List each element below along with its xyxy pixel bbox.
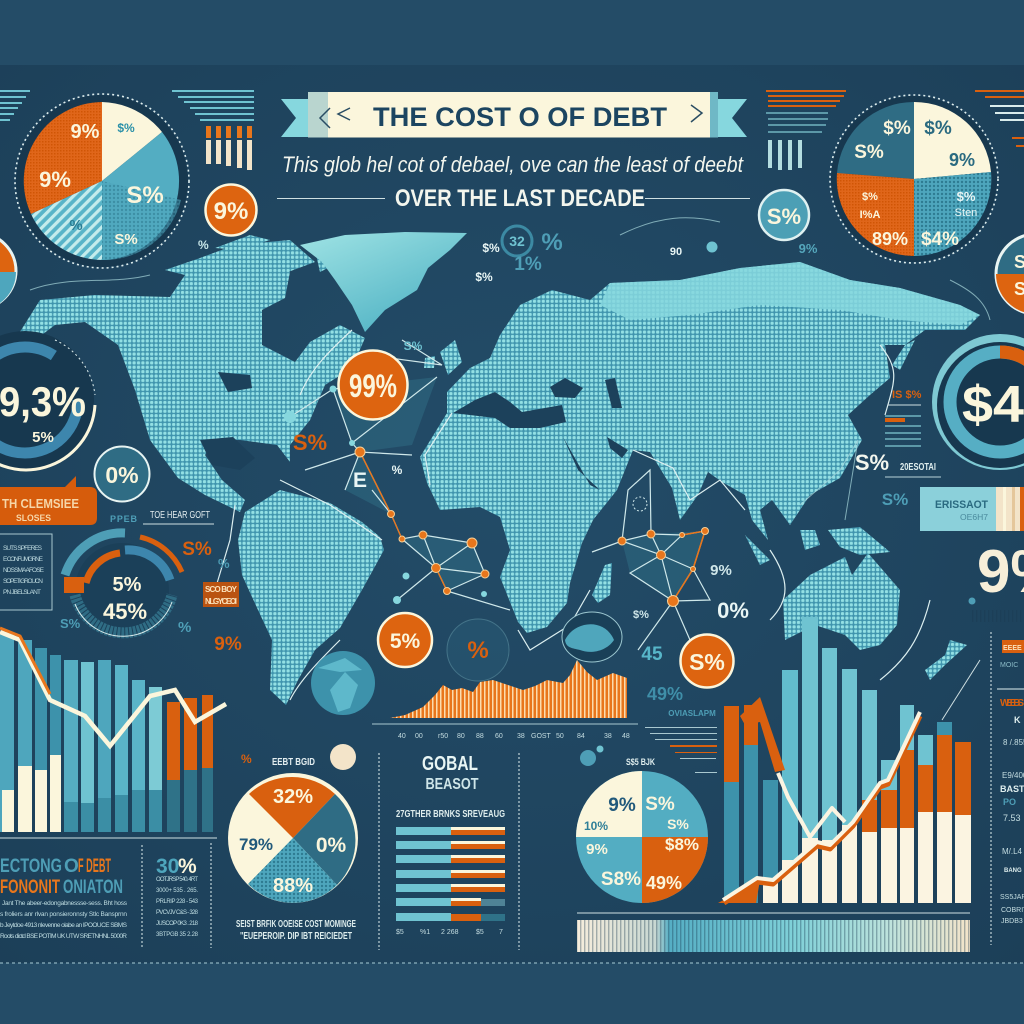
pie chart: bottom right: 9%: [586, 841, 608, 858]
label: small tags: S%: [404, 339, 423, 353]
paragraph: debt: b Jeytdoe 4913 nlevenne olabe an IPOOUCE SBMS: [0, 922, 128, 929]
callout: teal 0 percent: 0%: [105, 462, 139, 488]
pie chart: top right: $%: [883, 118, 911, 139]
text panel: left: SUTS SPFERES: [3, 545, 43, 552]
label: teal percent: 9%: [799, 241, 818, 256]
label: teal gauge percent: [60, 556, 230, 636]
paragraph: debt: Jant The abeer-edongabnessse-sess. Bht hoss: [2, 900, 128, 907]
right column text: MOIC: [1000, 662, 1018, 669]
stripes: top centre right: [766, 90, 846, 170]
box: erissaot: ERISSAOT: [935, 499, 988, 511]
gauge: dollar 4: [932, 334, 1024, 470]
horizontal bar chart: 7: [499, 929, 503, 936]
heading: debt: ECTONG: [0, 856, 62, 877]
area chart: orange: 50: [556, 733, 564, 740]
map: arctic islands: [165, 235, 340, 280]
label: horizontal bars: 27GTHER BRNKS SREVEAUG: [396, 809, 505, 820]
pie chart: top left: $%: [117, 121, 135, 135]
map: south america: [238, 490, 384, 705]
pie chart: top left: S%: [126, 182, 164, 209]
trend lines: [723, 660, 980, 903]
pie chart: top right: $%: [957, 189, 976, 204]
map: arctic russia highlight: [600, 262, 980, 325]
bar chart: right: [577, 617, 980, 913]
box: erissaot: OE6H7: [960, 513, 989, 522]
text panel: left: [0, 534, 52, 610]
horizontal bar chart: [396, 827, 505, 936]
bottom gradient strip: [577, 920, 970, 952]
paragraph: debt: Roots dictd BSE POTIM UK UTW SRETNHNL 5000R: [0, 933, 127, 940]
pie chart: bottom right: $8%: [665, 835, 699, 854]
label: teal S percent: S%: [882, 490, 908, 509]
label: pie heading: [241, 744, 356, 770]
labels: right of indian ocean: 45: [641, 644, 663, 665]
trend: orange peak: [740, 697, 785, 772]
heading: global: BEASOT: [426, 776, 479, 793]
stat: 30 percent: 3000+ 535 . 265.: [156, 888, 198, 894]
pie chart: top right: $4%: [921, 229, 959, 250]
callout: 99 percent: [338, 350, 408, 420]
callout: 99 percent: 99%: [349, 368, 397, 404]
title banner: [281, 92, 747, 138]
area chart: orange: 80: [457, 733, 465, 740]
pie chart: bottom right: 10%: [584, 819, 608, 833]
labels: right of indian ocean: [633, 562, 749, 718]
icon: teal world fragment: [562, 612, 622, 662]
area chart: orange: [372, 660, 638, 740]
circle: left edge: [0, 233, 16, 310]
bars: cream segments: [763, 812, 971, 903]
label: orange S percent: S%: [293, 430, 327, 455]
map: seas: [200, 372, 628, 490]
pie chart: top right: I%A: [860, 209, 880, 221]
caption: pie: [236, 919, 356, 942]
heading: debt: O: [64, 856, 79, 877]
label: small tags: [353, 339, 423, 492]
callout: teal S percent: S%: [767, 204, 801, 229]
right column text: JBDB3: [1001, 918, 1023, 925]
stat: 30 percent: 30: [156, 855, 179, 878]
pie chart: bottom right: 9%: [608, 795, 636, 816]
network: indian ocean: [592, 470, 710, 650]
heading: global: [422, 753, 479, 793]
map: greenland: [300, 232, 467, 332]
subtitle: This glob hel cot of debael, ove can the least of deebt: [282, 152, 744, 177]
labels: right of indian ocean: OVIASLAPM: [668, 709, 716, 718]
area chart: orange: 60: [495, 733, 503, 740]
stripes: top far right: [975, 90, 1024, 147]
gauge: 5 and 45 percent: 5%: [113, 574, 142, 596]
map: coast lines: [215, 330, 930, 700]
bars: darker segments: [64, 790, 162, 832]
text panel: left: NDSSMAAFOSE: [3, 567, 45, 574]
pie chart: bottom right: S8%: [601, 869, 641, 890]
label: small tags: E: [353, 469, 367, 492]
stat: 30 percent: 3BTPGB 35 2.28: [156, 932, 199, 938]
center top percent cluster: 90: [670, 246, 682, 258]
label: orange S percent gauge: S%: [182, 539, 212, 560]
callout: orange 9 percent right: S%: [689, 649, 725, 675]
labels: right of indian ocean: 49%: [647, 684, 683, 704]
gauge: dollar 4: $4: [962, 376, 1024, 434]
heading: debt: ONIATON: [63, 877, 123, 898]
gauge: 5 and 45 percent: 45%: [103, 599, 147, 624]
label: teal gauge percent: %: [218, 556, 230, 571]
label: 20 social: [885, 462, 941, 477]
center top percent cluster: $%: [482, 241, 500, 255]
world map: [18, 218, 990, 705]
callout: orange 9 percent: [206, 184, 256, 236]
center top percent cluster: $%: [475, 270, 493, 284]
text panel: left: PN JBELSLANT: [3, 589, 41, 596]
map: eurasia and africa: [420, 262, 980, 633]
circle: right edge: [996, 234, 1024, 314]
pie chart: top left: 9%: [71, 121, 100, 143]
map: japan: [826, 340, 915, 433]
horizontal bar chart: 2 268: [441, 929, 459, 936]
caption: pie: SEIST BRFIK OOEISE COST MOMINGE: [236, 919, 356, 930]
stat: 30 percent: JUSCOP 0K3 . 218: [156, 921, 199, 927]
label: S percent map right: S%: [855, 450, 889, 475]
right column text: EEEE: [1003, 645, 1022, 652]
subtitle line two: OVER THE LAST DECADE: [395, 185, 645, 212]
map: british isles: [424, 340, 462, 375]
divider dashes: [142, 843, 211, 949]
dotted strip: [968, 598, 1024, 622]
paragraph: debt: s froliers anr rlvan ponsieronnsty Stlc Bansprnn: [0, 911, 127, 918]
badge: sco boy: [203, 582, 239, 607]
stat: 30 percent: %: [178, 855, 197, 878]
divider dashes: [379, 753, 519, 950]
pie chart: bottom centre-left: 88%: [273, 875, 313, 897]
stat: 30 percent: OOTJRSP 540. 4RT: [156, 877, 198, 883]
heading: debt: F DEBT: [78, 856, 111, 877]
pie chart: top right: 9%: [949, 150, 975, 170]
stat: 30 percent: PRLRIP 228 - 543: [156, 899, 199, 905]
mini bars: map right: [885, 389, 922, 447]
stripes: top left: [0, 90, 30, 121]
title text: THE COST O OF DEBT: [373, 102, 667, 132]
gauge: 9,3 percent: [0, 331, 95, 470]
callout: orange 9 percent: 9%: [214, 198, 248, 225]
pie chart: top right: $%: [924, 118, 952, 139]
labels: right of indian ocean: 9%: [710, 562, 732, 579]
ring: orange percent: %: [467, 637, 489, 664]
area chart: orange: r50: [438, 733, 448, 740]
map: arc lines: [30, 218, 990, 520]
ring: orange percent: [447, 619, 509, 681]
pie chart: top left: %: [69, 217, 83, 234]
pie chart: bottom centre-left: 79%: [239, 835, 273, 854]
right column text: 7.53: [1003, 813, 1021, 823]
network nodes: atlantic: [355, 447, 489, 594]
area chart: orange: 40: [398, 733, 406, 740]
center top percent cluster: 1%: [514, 254, 542, 275]
area chart: orange: GOST: [531, 733, 552, 740]
pie chart: bottom right: 49%: [646, 873, 682, 893]
stripes: header right of pie: [172, 90, 254, 170]
area chart: orange: 38: [517, 733, 525, 740]
labels: right of indian ocean: $%: [633, 609, 649, 621]
map: indonesia: [745, 527, 890, 565]
callout: orange banner: SLOSES: [16, 513, 51, 524]
callout: orange banner: [0, 476, 97, 525]
icon: globe: [311, 651, 375, 715]
text panel: left: SOPETI GROUCN: [3, 578, 43, 585]
horizontal bar chart: $5: [396, 929, 404, 936]
pie chart: bottom right: [576, 771, 708, 903]
label: toe hear: TOE HEAR GOFT: [150, 510, 210, 521]
callout: teal 0 percent: [94, 446, 150, 502]
label: small tags: %: [392, 463, 403, 477]
mini bars: map right: IS $%: [892, 389, 922, 401]
pie chart: top left: S%: [114, 231, 138, 248]
callout: orange 9 percent right: [680, 634, 734, 688]
pie chart: bottom centre-left: [228, 773, 358, 903]
label: small percent: %: [198, 238, 209, 252]
pie chart: top right: S%: [854, 142, 884, 163]
callout: orange 5 percent: [378, 613, 432, 667]
center top percent cluster: 32: [509, 233, 525, 249]
label: pie heading: EEBT BGID: [272, 757, 315, 768]
caption: pie: "EUEPEROIP. DIP IBT REICIEDET: [240, 931, 352, 942]
area chart: orange: 38: [604, 733, 612, 740]
horizontal bar chart: %1: [420, 929, 430, 936]
label: pie heading: %: [241, 752, 252, 766]
network teal nodes: [284, 386, 487, 604]
right column text: K: [1014, 715, 1021, 725]
area chart: orange: 00: [415, 733, 423, 740]
map: madagascar: [592, 563, 612, 603]
right column text: [991, 632, 1024, 945]
right column text: BAST: [1000, 784, 1024, 794]
pie chart: bottom right: S%: [667, 816, 689, 832]
labels: right of indian ocean: 0%: [717, 598, 749, 623]
mini stripes: [645, 727, 717, 773]
map: australia: [783, 553, 900, 650]
map: new zealand: [925, 640, 967, 680]
center top percent cluster: %: [541, 229, 563, 256]
label: 20 social: 20ESOTAI: [900, 462, 936, 473]
label: teal gauge percent: S%: [60, 616, 81, 631]
label: ppeb: PPEB: [110, 514, 138, 524]
stat: 30 percent: [156, 855, 199, 938]
pie chart: top right: 89%: [872, 229, 908, 249]
map: north america: [18, 258, 365, 512]
area chart: orange: 84: [577, 733, 585, 740]
callout: orange banner: TH CLEMSIEE: [2, 496, 79, 511]
pie chart: top right: Sten: [955, 207, 977, 219]
callout: teal S percent: [759, 190, 809, 240]
pie chart: bottom centre-left: 0%: [316, 834, 346, 857]
pie chart: bottom centre-left: 32%: [273, 786, 313, 808]
trend: orange wedge: [718, 880, 760, 903]
right column text: PO: [1003, 797, 1016, 807]
icon: small globe: [580, 746, 604, 766]
badge: sco boy: NLGYCEOI: [205, 597, 237, 606]
pie chart: top right: [830, 95, 998, 263]
network: atlantic: [284, 340, 510, 610]
heading: debt: FONONIT: [0, 877, 60, 898]
network nodes: indian ocean: [618, 528, 708, 606]
area chart: orange: 88: [476, 733, 484, 740]
paragraph: debt: [0, 900, 128, 940]
pie chart: top left: [15, 94, 189, 268]
label: pie heading right: S$5 BJK: [626, 757, 655, 768]
right column text: M/.L4: [1002, 847, 1023, 856]
gauge: 9,3 percent: 5%: [32, 429, 54, 446]
callout: orange 5 percent: 5%: [390, 630, 420, 653]
trend line: [0, 628, 226, 746]
stat: 30 percent: PVCVJV C&S - 328: [156, 910, 199, 916]
badge: sco boy: SCO BOY: [205, 585, 238, 594]
pie chart: bottom right: S%: [645, 794, 675, 815]
bar chart: left: [0, 628, 226, 838]
right column text: WEEBS: [1000, 698, 1024, 709]
horizontal bar chart: $5: [476, 929, 484, 936]
heading: global: GOBAL: [422, 753, 478, 775]
center top percent cluster: [475, 226, 718, 284]
gauge: 9,3 percent: 9,3%: [0, 378, 86, 425]
label: orange 9 percent: 9%: [214, 634, 242, 655]
text panel: left: E CONFUMGRNE: [3, 556, 44, 563]
bars: orange segments: [862, 735, 952, 832]
label: toe hear: [143, 510, 214, 524]
area chart: orange: 48: [622, 733, 630, 740]
heading: debt: [0, 856, 123, 898]
label: teal gauge percent: %: [178, 619, 191, 636]
gauge: 5 and 45 percent: [64, 533, 182, 637]
pie chart: top right: $%: [862, 191, 878, 203]
pie chart: top left: 9%: [39, 167, 71, 192]
right column text: BANG: [1004, 868, 1022, 874]
box: erissaot: [920, 487, 1024, 531]
bars: lower segments: [2, 755, 61, 832]
